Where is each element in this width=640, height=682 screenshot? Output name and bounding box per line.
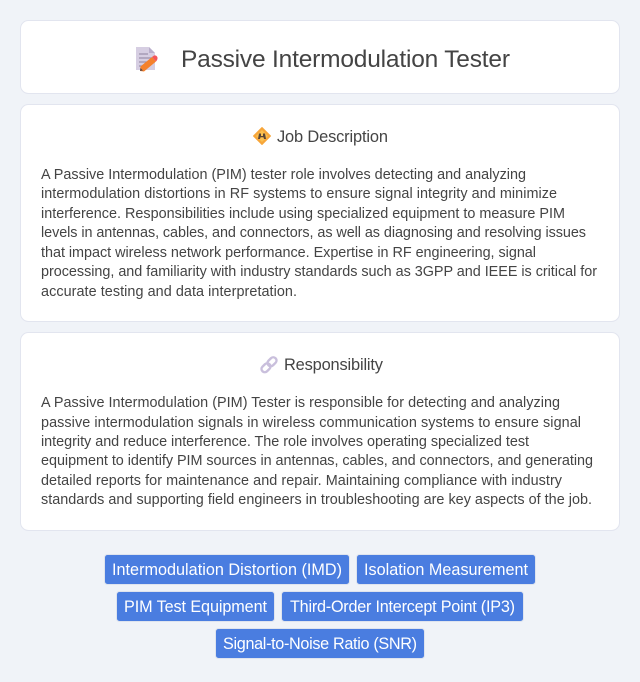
text block: job description: levels in antennas, cables, and connectors, as well as diagnosing and resolving issues (41, 225, 586, 241)
icon: construction diamond (254, 128, 270, 144)
heading: responsibility: Responsibility (284, 356, 384, 374)
text block: responsibility (41, 395, 593, 508)
tag: third-order intercept point (282, 592, 524, 622)
text block: responsibility: integrity and reduce interference. The role involves operating specialized test (41, 434, 529, 450)
text block: job description: intermodulation distortions in RF systems to ensure signal integrity and minimize (41, 186, 557, 202)
tag: third-order intercept point: Third-Order Intercept Point (IP3) (290, 598, 515, 616)
tag: signal-to-noise ratio (216, 628, 424, 658)
heading: job description: Job Description (277, 128, 388, 146)
tag: PIM test equipment (116, 592, 274, 622)
tag: isolation measurement: Isolation Measurement (364, 561, 528, 579)
text block: responsibility: passive intermodulation signals in wireless communication systems to ensure signal (41, 415, 581, 431)
title: Passive Intermodulation Tester (181, 46, 510, 73)
text block: job description: A Passive Intermodulation (PIM) tester role involves detecting and analyzing (41, 167, 526, 183)
text block: job description: accurate testing and data interpretation. (41, 284, 297, 300)
tag group (104, 554, 536, 658)
text block: job description: that impact wireless network performance. Expertise in RF engineering, signal (41, 245, 536, 261)
text block: job description (41, 167, 597, 300)
text block: job description: processing, and familiarity with industry standards such as 3GPP and IEEE is critical for (41, 264, 597, 280)
panel: responsibility (20, 332, 620, 530)
tag: intermodulation distortion (104, 554, 350, 584)
tag: signal-to-noise ratio: Signal-to-Noise Ratio (SNR) (223, 635, 417, 653)
tag: intermodulation distortion: Intermodulation Distortion (IMD) (112, 561, 342, 579)
panel: title header (20, 20, 620, 94)
icon: chain link (260, 356, 278, 374)
text block: responsibility: detailed reports for maintenance and repair. Maintaining compliance with industry (41, 473, 563, 489)
text block: responsibility: A Passive Intermodulation (PIM) Tester is responsible for detecting and analyzing (41, 395, 560, 411)
icon: memo with pencil (136, 47, 158, 72)
text block: responsibility: standards and supporting field engineers in troubleshooting are key aspects of the job. (41, 492, 592, 508)
text block: responsibility: equipment to identify PIM sources in antennas, cables, and connectors, and generating (41, 453, 593, 469)
panel: job description (20, 104, 620, 322)
tag: isolation measurement (356, 554, 536, 584)
text block: job description: interference. Responsibilities include using specialized equipment to measure PIM (41, 206, 565, 222)
tag: PIM test equipment: PIM Test Equipment (124, 598, 268, 616)
